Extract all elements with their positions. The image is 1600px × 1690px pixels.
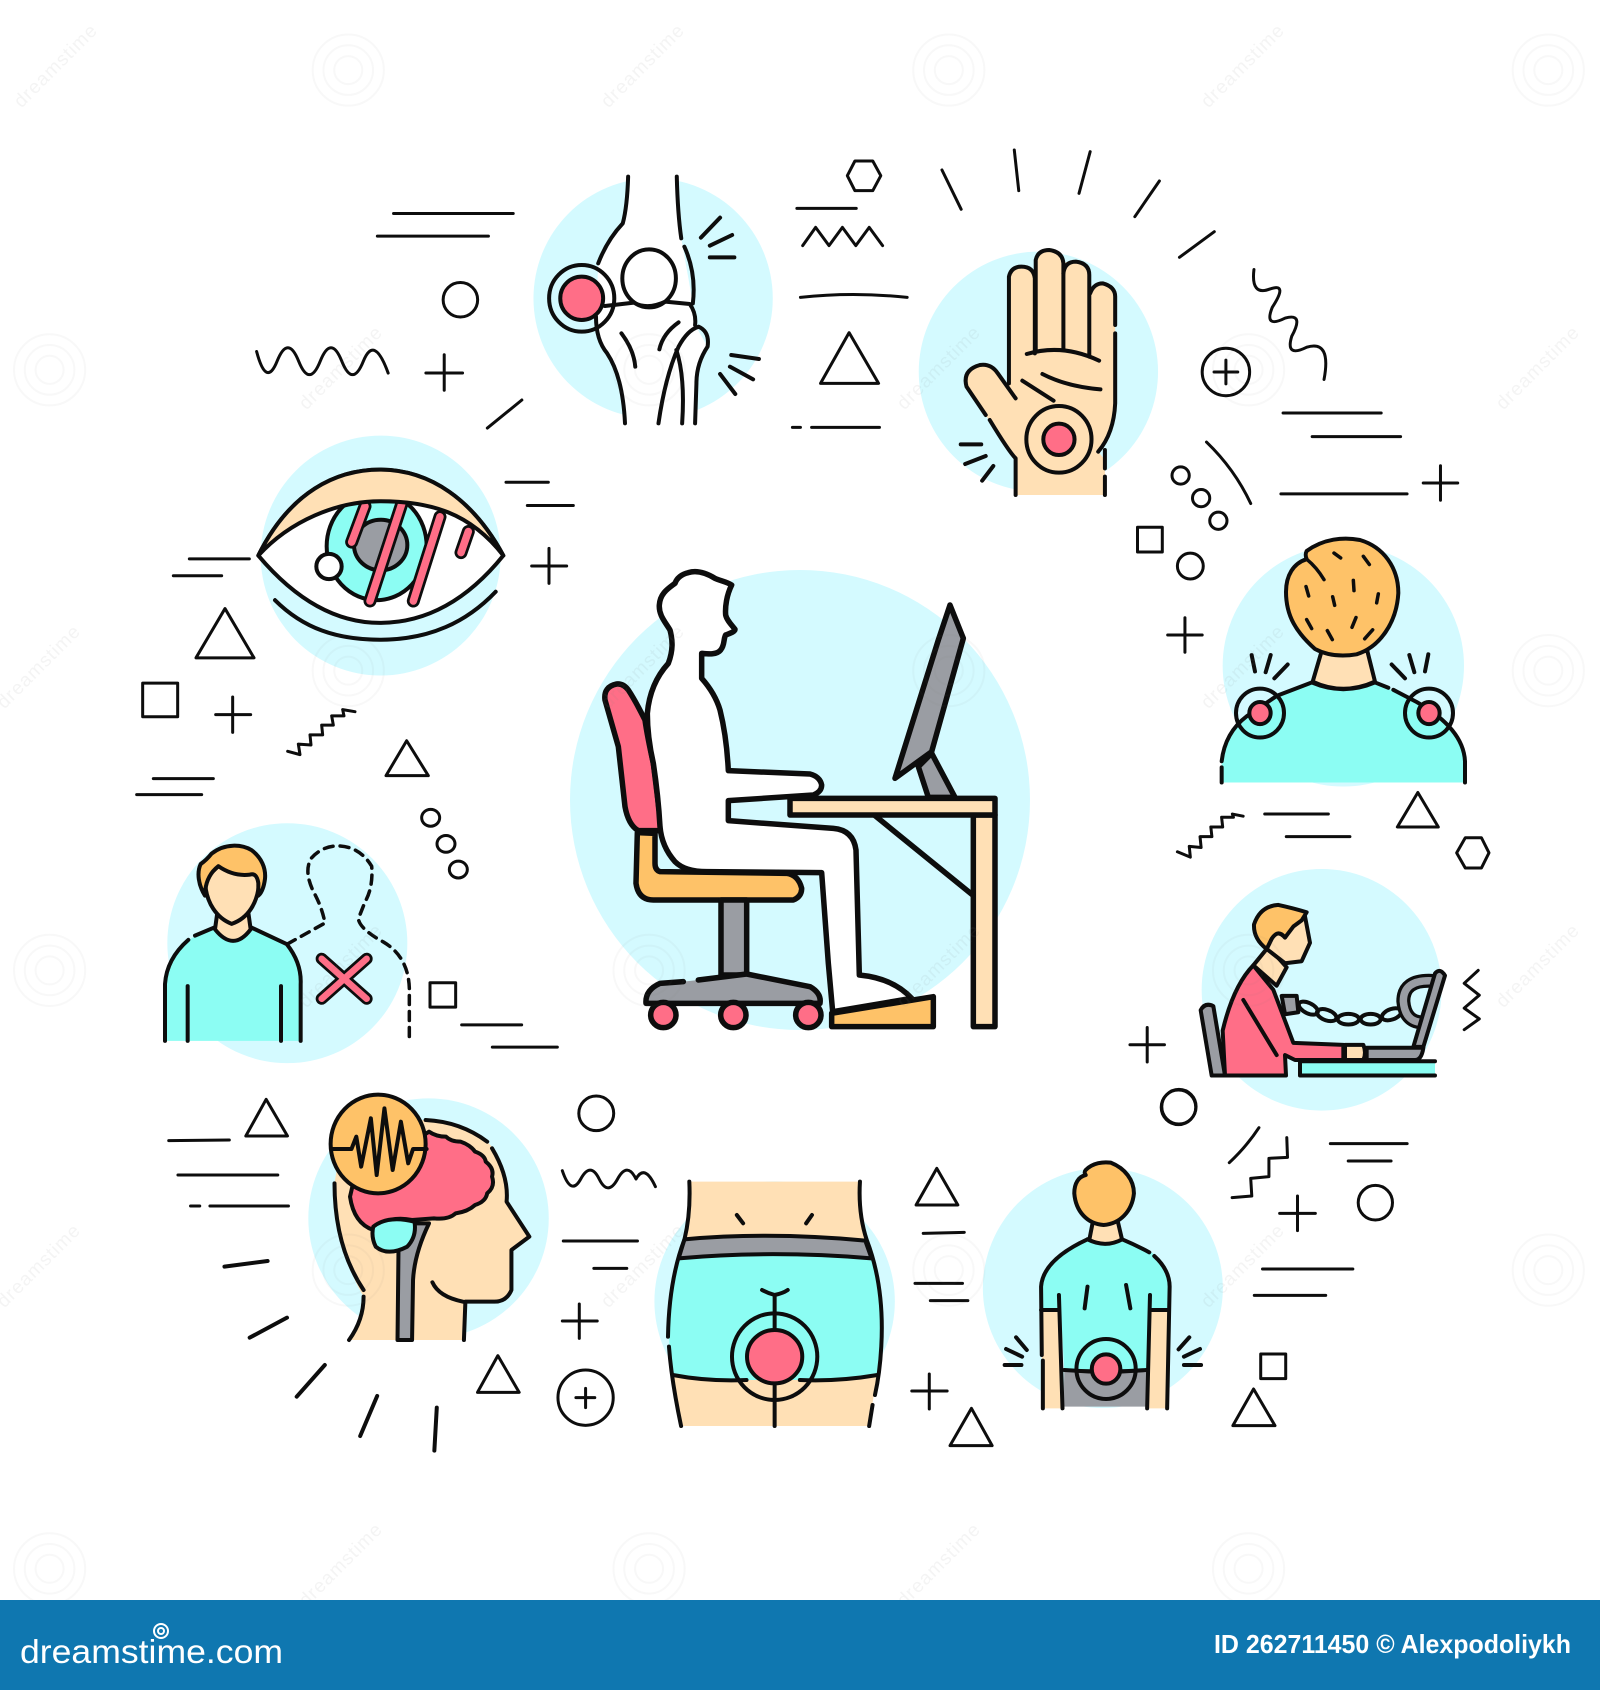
- brain: [350, 1132, 493, 1230]
- hair strokes: [1306, 553, 1378, 640]
- desk: [1300, 1061, 1435, 1076]
- face: [1267, 916, 1310, 963]
- neck: [1253, 947, 1287, 986]
- icon: pelvis and tailbone pain: [654, 1181, 895, 1426]
- office chair: [1201, 1005, 1225, 1076]
- logo text: dreamstime.com: [20, 1633, 283, 1670]
- icon: neck and shoulder pain: [1222, 539, 1465, 787]
- chain: [1297, 999, 1402, 1024]
- shackle ring: [1403, 981, 1432, 1022]
- watermark text: dreamstime: [597, 20, 689, 112]
- shoulder cuff: [1282, 996, 1298, 1014]
- pelvis target: [732, 1313, 817, 1400]
- watermark text: dreamstime: [1197, 621, 1289, 713]
- person silhouette: [647, 572, 912, 1012]
- image credit: ID 262711450 © Alexpodoliykh: [1214, 1629, 1571, 1659]
- shoulder rays: [1252, 654, 1428, 678]
- pain rays: [701, 218, 759, 394]
- iris: [327, 492, 427, 600]
- decoration: left side shapes: [137, 482, 573, 1047]
- waist skin: [684, 1182, 865, 1240]
- watermark text: dreamstime: [893, 1519, 985, 1611]
- hair: [199, 846, 265, 896]
- pain target: [549, 265, 614, 332]
- logo spiral: [154, 1624, 168, 1638]
- watermark text: dreamstime: [295, 1519, 387, 1611]
- laptop screen: [1413, 971, 1445, 1047]
- icon: hand wrist pain: [919, 250, 1158, 495]
- chair back: [605, 684, 662, 831]
- cross mark: [322, 959, 367, 999]
- right shoulder target: [1405, 689, 1453, 738]
- hand: [1345, 1045, 1365, 1060]
- spine: [398, 1223, 429, 1340]
- left shoulder target: [1236, 689, 1284, 738]
- icon: head with brain and pulse: [224, 1095, 549, 1451]
- red veins: [352, 504, 468, 601]
- icon: dry eye: [258, 436, 503, 675]
- chair stem: [721, 900, 747, 975]
- watermark text: dreamstime: [597, 1220, 689, 1312]
- waistband: [679, 1236, 872, 1258]
- chair base: [646, 974, 820, 1003]
- watermark text: dreamstime: [295, 322, 387, 414]
- glint: [316, 554, 342, 579]
- neck: [215, 912, 251, 941]
- decoration: top centre shapes and rays: [792, 150, 1214, 427]
- desk: [790, 798, 995, 1027]
- torso: [1223, 965, 1343, 1076]
- back rays: [1005, 1337, 1201, 1365]
- shirt: [165, 927, 301, 1041]
- laptop base: [1367, 1048, 1423, 1060]
- head: [1286, 539, 1398, 656]
- arms: [1042, 1310, 1168, 1408]
- chair wheels: [651, 1002, 821, 1028]
- head: [1074, 1162, 1134, 1225]
- eyelid: [258, 470, 503, 556]
- hand rays: [961, 444, 993, 481]
- wrist target: [1026, 406, 1092, 473]
- decoration: lower left shapes: [169, 1096, 655, 1425]
- footrest: [832, 997, 933, 1027]
- watermark text: dreamstime: [597, 621, 689, 713]
- watermark text: dreamstime: [893, 920, 985, 1012]
- icon: knee joint pain: [533, 177, 773, 423]
- head profile: [335, 1120, 529, 1340]
- icon: person with missing shadow: [165, 823, 409, 1063]
- head rays: [224, 1261, 437, 1451]
- decoration: lower right shapes: [912, 1089, 1407, 1446]
- footer bar: [0, 1600, 1600, 1690]
- neck: [1089, 1222, 1122, 1244]
- watermark text: dreamstime: [1197, 20, 1289, 112]
- watermark text: dreamstime: [893, 322, 985, 414]
- watermark text: dreamstime: [1492, 920, 1584, 1012]
- watermark text: dreamstime: [1197, 1220, 1289, 1312]
- monitor: [895, 605, 963, 778]
- watermark text: dreamstime: [10, 20, 102, 112]
- monitor stand: [918, 753, 955, 797]
- jaw: [432, 1282, 463, 1302]
- dashed silhouette: [287, 846, 409, 1043]
- pupil: [354, 520, 407, 570]
- central icon: seated person at desk: [570, 570, 1030, 1030]
- chair seat: [636, 833, 802, 900]
- watermark text: dreamstime: [295, 920, 387, 1012]
- shorts: [669, 1254, 881, 1380]
- icon: person chained to laptop: [1201, 869, 1445, 1111]
- watermark text: dreamstime: [1492, 322, 1584, 414]
- face: [205, 866, 259, 924]
- neck: [1313, 651, 1375, 689]
- icon: lower back pain: [983, 1162, 1223, 1408]
- thighs: [673, 1377, 876, 1426]
- cerebellum: [372, 1219, 415, 1252]
- shorts: [1064, 1370, 1147, 1407]
- back target: [1076, 1339, 1136, 1399]
- pulse circle: [331, 1095, 427, 1193]
- hair: [1254, 905, 1307, 949]
- shirt: [1222, 682, 1465, 782]
- decoration: top left and right shapes: [257, 213, 1489, 1125]
- shirt: [1041, 1239, 1170, 1370]
